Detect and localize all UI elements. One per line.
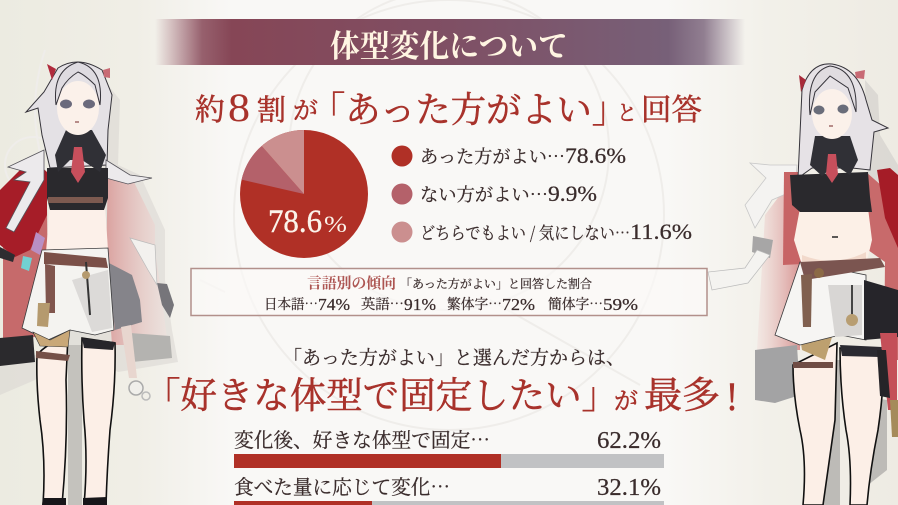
pie chart <box>240 130 368 258</box>
legend item: should exist: 78.6% <box>565 143 626 168</box>
legs <box>793 343 837 505</box>
tie <box>826 154 838 183</box>
language trend box: 72% <box>502 295 535 314</box>
subheading: 「あった方がよい」と選んだ方からは、 <box>283 343 625 370</box>
ghost hair <box>745 163 797 228</box>
tie <box>71 147 85 183</box>
heading: about 80 percent: 割 <box>257 88 286 129</box>
skirt <box>775 262 866 345</box>
belt <box>44 252 108 268</box>
black top <box>47 168 108 210</box>
legend item: should not exist: ない方がよい… <box>420 181 548 207</box>
heading: about 80 percent: と <box>617 97 637 127</box>
bar: fixed at preferred shape <box>234 424 664 468</box>
coat and red sleeve <box>3 205 48 340</box>
illustration: character, changed figure <box>708 64 898 505</box>
bar: changes with food eaten <box>234 471 664 505</box>
heading: about 80 percent: が <box>293 91 318 127</box>
language trend box: 91% <box>404 295 436 314</box>
skirt <box>22 248 114 340</box>
belly <box>794 208 872 265</box>
legend <box>392 143 692 244</box>
ghost shadow <box>0 85 178 395</box>
legend item: either: どちらでもよい / 気にしない… <box>420 219 630 244</box>
heading: about 80 percent: 約 <box>195 85 225 129</box>
pie chart: 78.6 <box>268 204 322 240</box>
legend item: either: 11.6% <box>630 219 692 244</box>
title banner: 体型変化について <box>330 29 568 64</box>
big heading: が <box>614 381 638 416</box>
bar: fixed at preferred shape: 変化後、好きな体型で固定… <box>234 424 490 453</box>
language trend box: 簡体字… <box>548 294 603 314</box>
language trend box: 59% <box>603 295 638 314</box>
legs <box>37 335 68 505</box>
shorts piece <box>33 330 70 347</box>
legend item: should not exist: 9.9% <box>548 181 597 206</box>
face <box>812 89 852 139</box>
illustration: character, standard figure <box>0 62 178 505</box>
vials <box>21 256 32 271</box>
ornaments <box>799 75 806 92</box>
big heading: 最多 <box>644 365 720 419</box>
eyes and mouth <box>60 100 72 108</box>
ghost shadow <box>865 80 898 250</box>
eyes and mouth <box>814 106 824 114</box>
language trend box <box>191 268 707 316</box>
collar <box>55 130 106 172</box>
straps and keys <box>880 333 897 410</box>
faded sleeve and coat <box>106 170 168 345</box>
midriff <box>46 205 108 252</box>
legend item: should not exist <box>392 181 597 207</box>
language trend box: 74% <box>318 295 350 314</box>
collar <box>810 136 858 176</box>
language trend box: 「あった方がよい」と回答した割合 <box>400 275 592 292</box>
faded strap and charm <box>121 325 137 378</box>
black top <box>790 172 872 212</box>
pink coat and red sleeve <box>783 172 802 265</box>
ghost coat <box>757 175 800 350</box>
face <box>57 81 99 135</box>
heading: about 80 percent <box>195 82 702 133</box>
heading: about 80 percent: 「あった方がよい」 <box>310 82 627 133</box>
hair strands <box>6 150 152 232</box>
heading: about 80 percent: 8 <box>228 85 250 130</box>
bangs <box>809 66 856 115</box>
big heading: ! <box>726 374 738 419</box>
language trend box: 繁体字… <box>447 294 502 314</box>
legend item: should exist <box>392 143 626 169</box>
title banner <box>155 19 745 65</box>
pie chart: % <box>324 212 347 237</box>
bar: changes with food eaten: 32.1% <box>597 475 661 501</box>
heading: about 80 percent: 回答 <box>641 85 702 129</box>
language trend box: 言語別の傾向 <box>307 272 396 293</box>
language trend box: 日本語… <box>264 294 318 314</box>
ornaments <box>47 64 56 80</box>
hair <box>798 64 888 178</box>
bangs <box>55 62 101 105</box>
language trend box: 英語… <box>361 294 404 314</box>
bar: fixed at preferred shape: 62.2% <box>597 428 661 454</box>
bar: changes with food eaten: 食べた量に応じて変化… <box>234 471 450 500</box>
big heading: 「好きな体型で固定したい」 <box>144 367 618 419</box>
legend item: should exist: あった方がよい… <box>420 143 565 169</box>
hair back <box>26 62 112 168</box>
belt <box>800 258 885 280</box>
